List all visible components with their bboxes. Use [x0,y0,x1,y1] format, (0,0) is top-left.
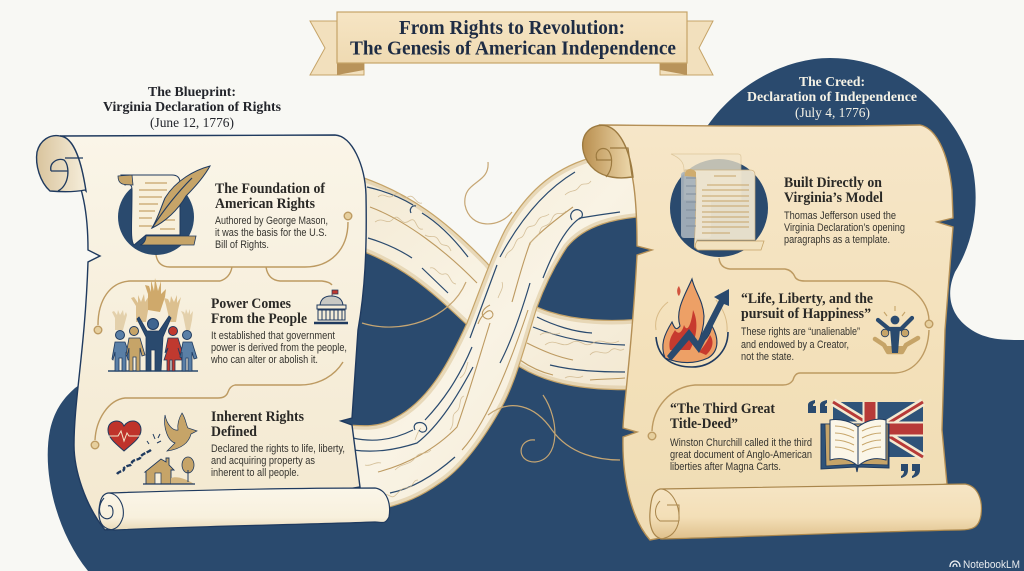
text: power comes from the people: It established that government [211,330,336,342]
text: power comes from the people: From the People [211,311,308,327]
icon: capitol building [314,290,348,323]
heading: the blueprint: (June 12, 1776) [150,116,234,131]
watermark: notebooklm: NotebookLM [963,559,1020,571]
text: inherent rights defined: and acquiring property as [211,455,315,467]
text: third great title-deed [670,401,812,473]
title banner: From Rights to Revolution: [399,17,625,39]
text: built directly on virginia's model: paragraphs as a template. [784,234,890,246]
connector lines [648,258,933,440]
text: built directly on virginia's model: Virginia Declaration’s opening [784,222,905,234]
text: inherent rights defined: inherent to all people. [211,467,299,479]
panel: declaration of independence scroll [583,125,981,540]
text: life liberty pursuit of happiness: pursuit of Happiness” [741,306,871,322]
icon: open book, flag and quote marks [808,400,923,478]
panel: virginia declaration scroll [37,135,390,530]
text: power comes from the people: power is derived from the people, [211,342,347,354]
text: third great title-deed: great document of Anglo-American [670,449,812,461]
text: foundation of american rights [215,181,328,251]
scroll body [60,135,366,530]
text: inherent rights defined: Inherent Rights [211,409,304,425]
icon: heart, chain, dove and house [108,413,197,484]
title banner: The Genesis of American Independence [350,38,676,60]
icon: document and quill [118,166,210,255]
bottom roller [650,484,981,539]
text: built directly on virginia's model: Built Directly on [784,175,882,191]
text: inherent rights defined: Defined [211,424,257,440]
heading: the creed [747,75,917,121]
icon: overlapping documents [670,154,768,257]
text: built directly on virginia's model: Thomas Jefferson used the [784,210,896,222]
text: life liberty pursuit of happiness [741,291,874,363]
text: power comes from the people: Power Comes [211,296,291,312]
text: foundation of american rights: American Rights [215,196,315,212]
text: life liberty pursuit of happiness: These rights are “unalienable” [741,326,860,338]
title banner [310,12,713,75]
left top curl [37,136,86,192]
icon: raised hands and people [108,278,198,371]
heading: the creed: (July 4, 1776) [795,106,870,121]
text: third great title-deed: “The Third Great [670,401,775,417]
icon: raised arms family [875,306,918,353]
heading: the blueprint: Virginia Declaration of Rights [103,100,282,115]
heading: the blueprint [103,85,282,131]
right top curl [583,125,633,178]
text: life liberty pursuit of happiness: and endowed by a Creator, [741,339,849,351]
text: power comes from the people [210,296,347,366]
heading: the creed: Declaration of Independence [747,90,917,105]
bottom roller [99,488,390,530]
heading: the creed: The Creed: [799,75,865,90]
text: inherent rights defined [211,409,345,479]
text: life liberty pursuit of happiness: not the state. [741,351,794,363]
parchment ribbon: left bottom to right top [352,158,636,508]
icon: flame and rising arrow [656,279,729,367]
text: third great title-deed: Winston Churchill called it the third [670,437,812,449]
text: foundation of american rights: The Foundation of [215,181,325,197]
text: foundation of american rights: Bill of Rights. [215,239,269,251]
connector lines [91,212,352,449]
text: third great title-deed: liberties after Magna Carts. [670,461,781,473]
parchment ribbon: left top to right middle [364,178,632,390]
text: foundation of american rights: it was the basis for the U.S. [215,227,327,239]
decorative flourishes [362,162,620,462]
text: life liberty pursuit of happiness: “Life, Liberty, and the [741,291,874,307]
text: power comes from the people: who can alter or abolish it. [210,354,318,366]
scroll body [600,125,953,540]
text: inherent rights defined: Declared the rights to life, liberty, [211,443,345,455]
text: third great title-deed: Title-Deed” [670,416,738,432]
text: built directly on virginia's model [784,175,905,246]
text: built directly on virginia's model: Virginia’s Model [784,190,883,206]
heading: the blueprint: The Blueprint: [148,85,236,100]
text: foundation of american rights: Authored by George Mason, [215,215,328,227]
